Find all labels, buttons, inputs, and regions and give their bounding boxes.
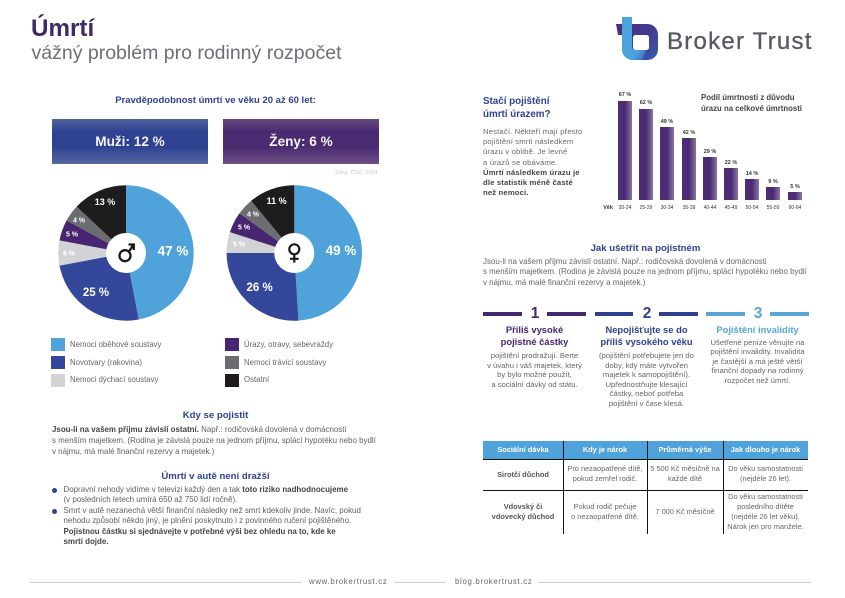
text: when to insure bbox=[52, 425, 376, 456]
step 2: 2 bbox=[643, 305, 651, 322]
text: accident insurance: úrazu v oblibě. Je levné bbox=[483, 147, 567, 156]
text: accident insurance: a úrazů se obáváme. bbox=[483, 158, 558, 167]
pie charts: men and women: 5 % bbox=[233, 242, 246, 248]
legend: Nemoci trávicí soustavy bbox=[244, 358, 326, 367]
table: Pro nezaopatřené dítě, bbox=[567, 464, 643, 473]
legend: Nemoci dýchací soustavy bbox=[70, 375, 158, 384]
bar chart: 22 % bbox=[725, 160, 737, 166]
step 3: finanční dopady na rodinný bbox=[711, 366, 804, 375]
table: 5 500 Kč měsíčně na bbox=[650, 464, 720, 473]
text: car death bullets: Pojistnou částku si sjednávejte v potřebné výši bez ohledu na to, kde ke bbox=[64, 527, 336, 536]
table: Průměrná výše bbox=[658, 445, 712, 454]
panel: women: Ženy: 6 % bbox=[269, 134, 333, 149]
step 3 bbox=[706, 305, 809, 385]
text: car death bullets: Dopravní nehody vidíme v televizi každý den a tak toto riziko nadhodnocujeme bbox=[64, 485, 348, 494]
heading: when to insure: Kdy se pojistit bbox=[183, 410, 248, 421]
step 1: by bylo možné použít, bbox=[497, 370, 572, 379]
text: how to save: Jsou-li na vašem příjmu závislí ostatní. Např.: rodičovská dovolená v domácnosti bbox=[483, 256, 767, 266]
step 3: pojištění invalidity. Invalidita bbox=[710, 347, 805, 356]
table: Do věku samostatnosti bbox=[728, 492, 803, 501]
step 1: Příliš vysoké bbox=[506, 324, 563, 335]
text: accident insurance: pojištění smrti následkem bbox=[483, 137, 573, 146]
text: when to insure: s menším majetkem. (Rodina je závislá pouze na jednom příjmu, splácí hypotéku nebo bydlí bbox=[52, 436, 376, 445]
legend: Úrazy, otravy, sebevraždy bbox=[244, 340, 333, 349]
text: car death bullets: (v posledních letech umírá 650 až 750 lidí ročně). bbox=[64, 495, 237, 504]
step 2: Nepojišťujte se do bbox=[605, 324, 688, 335]
panel: men bbox=[52, 119, 208, 164]
text: accident insurance bbox=[483, 127, 582, 197]
bar chart: 40-44 bbox=[704, 205, 717, 211]
pie charts: men and women: 11 % bbox=[267, 196, 287, 206]
table: Vdovský či bbox=[504, 502, 542, 511]
pie charts: men and women: 5 % bbox=[66, 232, 79, 238]
source: Zdroj: ČSÚ, 2014 bbox=[335, 170, 378, 176]
step 3: je častější a má ještě větší bbox=[712, 357, 803, 366]
pie charts: men and women: 4 % bbox=[247, 212, 260, 218]
text: how to save: s menším majetkem. (Rodina je závislá pouze na jednom příjmu, splácí hypotéku nebo bydlí bbox=[483, 267, 807, 276]
table: vdovecký důchod bbox=[492, 512, 554, 521]
legend: Nemoci oběhové soustavy bbox=[70, 340, 161, 349]
footer bbox=[30, 577, 811, 586]
bar chart: úrazu na celkové úmrtnosti bbox=[701, 104, 802, 113]
bar chart: 30-34 bbox=[661, 205, 674, 211]
step 3: Pojištění invalidity bbox=[716, 324, 799, 335]
panel: women bbox=[223, 119, 379, 164]
footer: www.brokertrust.cz bbox=[309, 577, 387, 586]
text: when to insure: v nájmu, má malé finanční rezervy a majetek.) bbox=[52, 447, 214, 456]
heading: accident insurance: úmrtí úrazem? bbox=[483, 109, 551, 120]
table: (nejdéle 26 let). bbox=[740, 474, 791, 483]
table: pokud zemřel rodič. bbox=[573, 474, 637, 483]
text: car death bullets: smrti dojde. bbox=[64, 537, 108, 546]
step 2: příliš vysokého věku bbox=[600, 336, 693, 347]
heading: car death: Úmrtí v autě není dražší bbox=[161, 471, 270, 482]
bar chart: 35-39 bbox=[683, 205, 696, 211]
logo bbox=[616, 17, 813, 60]
pie charts: men and women: 25 % bbox=[83, 287, 109, 299]
pie charts: men and women: 13 % bbox=[95, 197, 115, 207]
pie charts: men and women: 49 % bbox=[326, 243, 356, 258]
step 2: částky, neboť potřeba bbox=[610, 389, 683, 398]
table: Jak dlouho je nárok bbox=[731, 445, 800, 454]
table: Kdy je nárok bbox=[583, 445, 627, 454]
step 1: v úvahu i váš majetek, který bbox=[487, 360, 582, 370]
pie charts: men and women: 5 % bbox=[238, 224, 251, 232]
title: Úmrtí bbox=[31, 15, 94, 42]
pie charts: men and women: 47 % bbox=[158, 244, 188, 258]
table: každé dítě bbox=[668, 474, 702, 483]
heading: accident insurance: Stačí pojištění bbox=[483, 96, 549, 107]
subtitle: vážný problém pro rodinný rozpočet bbox=[32, 42, 342, 64]
bar chart: 60-64 bbox=[789, 205, 802, 211]
pie charts: men and women: 6 % bbox=[63, 250, 76, 258]
bar chart bbox=[603, 92, 802, 211]
pie charts: men and women bbox=[58, 185, 362, 321]
text: accident insurance: než nemoci. bbox=[483, 188, 529, 197]
legend: Ostatní bbox=[244, 375, 269, 384]
table: Sirotčí důchod bbox=[497, 470, 549, 479]
heading: probability: Pravděpodobnost úmrtí ve věku 20 až 60 let: bbox=[115, 95, 316, 106]
step 3: Ušetřené peníze věnujte na bbox=[710, 338, 805, 346]
bar chart: 50-54 bbox=[746, 205, 759, 211]
bar chart: 14 % bbox=[746, 171, 758, 177]
bar chart: 67 % bbox=[619, 92, 631, 98]
text: when to insure: Jsou-li na vašem příjmu závislí ostatní. Např.: rodičovská dovolená v domácnosti bbox=[52, 425, 346, 434]
footer: blog.brokertrust.cz bbox=[455, 577, 532, 586]
legend bbox=[51, 338, 333, 387]
step 1: 1 bbox=[531, 305, 539, 322]
table: Do věku samostatnosti bbox=[728, 464, 803, 473]
bar chart: 9 % bbox=[768, 179, 778, 185]
pie charts: men and women: 4 % bbox=[73, 218, 86, 224]
logo: Broker Trust bbox=[667, 28, 813, 54]
bar chart: 62 % bbox=[640, 100, 652, 106]
heading: how to save: Jak ušetřit na pojistném bbox=[591, 243, 700, 254]
bar chart: 42 % bbox=[683, 130, 695, 136]
step 3: 3 bbox=[754, 305, 762, 322]
step 2: pojištění v čase klesá. bbox=[609, 398, 684, 408]
table: Nárok jen pro manžele. bbox=[727, 522, 804, 531]
text: accident insurance: Nestačí. Někteří mají přesto bbox=[483, 127, 582, 136]
legend: Novotvary (rakovina) bbox=[70, 358, 142, 367]
bar chart: 49 % bbox=[661, 119, 673, 125]
bar chart: 55-59 bbox=[767, 205, 780, 211]
bar chart: Podíl úmrtnosti z důvodu bbox=[701, 93, 795, 102]
step 3: rozpočet než úmrtí. bbox=[725, 376, 790, 385]
heading: accident insurance bbox=[483, 96, 551, 120]
bar chart: 20-24 bbox=[619, 205, 632, 211]
step 1 bbox=[483, 305, 586, 388]
text: how to save bbox=[483, 256, 807, 287]
text: car death bullets: nehodu způsobí někdo jiný, je plnění poskytnuto i z povinného ručení pojištěného. bbox=[64, 516, 351, 525]
bar chart: 25-29 bbox=[640, 205, 653, 211]
table: Pokud rodič pečuje bbox=[574, 502, 636, 511]
bar chart: Věk bbox=[603, 205, 614, 211]
table: Sociální dávka bbox=[497, 445, 549, 454]
step 2: majetek k samopojištění). bbox=[603, 370, 690, 379]
table: posledního dítěte bbox=[737, 502, 794, 511]
step 1: a sociální dávky od státu. bbox=[491, 380, 578, 388]
pie charts: men and women: 26 % bbox=[246, 282, 273, 294]
table: (nejdéle 26 let věku). bbox=[731, 512, 800, 521]
table bbox=[483, 441, 808, 534]
text: how to save: v nájmu, má malé finanční rezervy a majetek.) bbox=[483, 278, 645, 287]
table: o nezaopatřené dítě. bbox=[571, 512, 639, 521]
step 1: pojištění prodražují. Berte bbox=[491, 351, 578, 360]
step 2 bbox=[595, 305, 698, 408]
text: accident insurance: Úmrtí následkem úrazu je bbox=[483, 168, 580, 177]
text: car death bullets bbox=[52, 485, 361, 546]
step 2: doby, kdy máte vytvořen bbox=[605, 360, 688, 370]
step 2: (pojištění potřebujete jen do bbox=[599, 351, 694, 360]
text: accident insurance: dle statistik méně časté bbox=[483, 178, 573, 187]
step 2: Upřednostňujte klesající bbox=[605, 380, 688, 388]
step 1: pojistné částky bbox=[501, 336, 568, 347]
bar chart: 45-49 bbox=[725, 205, 738, 211]
table: 7 000 Kč měsíčně bbox=[655, 507, 715, 516]
panel: men: Muži: 12 % bbox=[95, 134, 165, 149]
text: car death bullets: Smrt v autě nezanechá větší finanční následky než smrt kdekoliv jinde. Navíc, pokud bbox=[64, 506, 361, 515]
bar chart: 5 % bbox=[790, 184, 800, 190]
bar chart: 29 % bbox=[704, 149, 716, 155]
